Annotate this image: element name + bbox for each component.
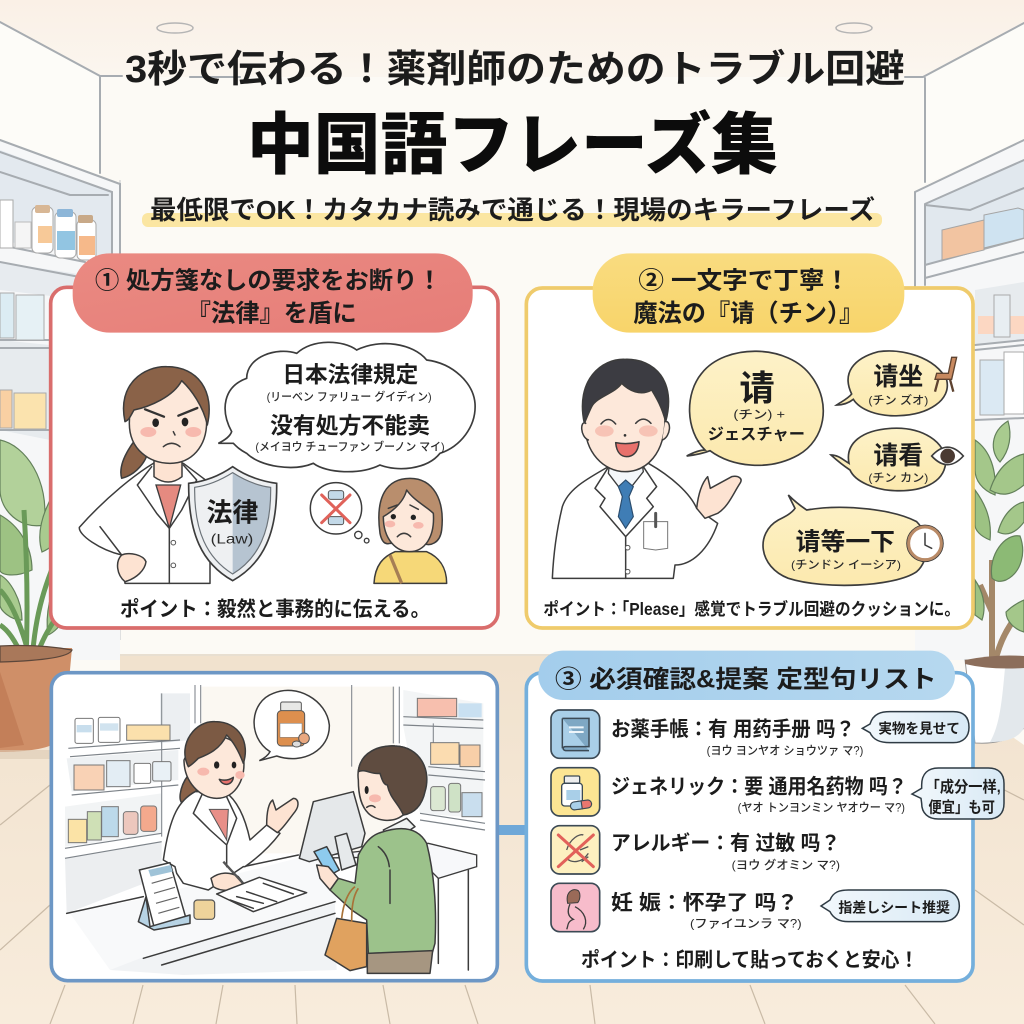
subtitle highlight band [142, 213, 882, 227]
pharmacist talking [163, 722, 298, 891]
panel 2: magic word qing [526, 253, 973, 628]
icon: crossed allergy [551, 826, 600, 874]
speech bubble: please wait: (チンドン イーシア) [791, 558, 901, 571]
speech bubble: please look: (チン カン) [868, 472, 929, 485]
speech bubble: please sit [837, 351, 947, 416]
panel 1: refuse without prescription [51, 253, 498, 628]
icon: bottle and pills [551, 768, 600, 816]
callout: pointing sheet: 指差しシート推奨 [838, 900, 950, 916]
row 4: pregnancy: (ファイユンラ マ?) [690, 918, 802, 931]
monitor [299, 792, 365, 870]
counter [67, 843, 477, 975]
speech bubble: qing with gesture: (チン) + [733, 407, 785, 421]
panel 3 frame [51, 673, 497, 981]
icon: law shield: 法律 [207, 498, 258, 528]
panel 4 heading [538, 651, 955, 700]
floor [0, 656, 1024, 1024]
speech bubble: medicine bottle [254, 690, 329, 761]
callout: same ingredients: 「成分一样, [926, 778, 1001, 796]
speech cloud: legal statement: (メイヨウ チューファン ブーノン マイ) [255, 440, 445, 454]
row 1: medicine notebook: (ヨウ ヨンヤオ ショウツァ マ?) [707, 744, 863, 757]
icon: book [551, 710, 600, 758]
clipboard sign [138, 863, 190, 930]
panel 2 heading: 魔法の『请（チン）』 [633, 300, 863, 328]
panel 4: checklist [526, 651, 1004, 981]
speech bubble: please sit: 请坐 [873, 363, 923, 391]
thought bubble: crossed out medicine [310, 483, 369, 543]
title line 1: 3秒で伝わる！薬剤師のためのトラブル回避 [125, 48, 905, 91]
icon: law shield [189, 467, 277, 581]
speech bubble: please wait [763, 495, 927, 585]
callout: same ingredients: 便宜」も可 [928, 798, 995, 816]
row 4: pregnancy [551, 883, 959, 932]
callout: show real item: 実物を見せて [878, 720, 960, 736]
icon: law shield: (Law) [211, 530, 253, 546]
row 3: allergy: (ヨウ グオミン マ?) [732, 858, 840, 872]
panel 2 heading: ② 一文字で丁寧！ [638, 268, 850, 295]
right shelf [915, 140, 1024, 660]
right plant [980, 560, 1024, 662]
back wall and shelves [65, 685, 485, 913]
patient: worried woman [374, 478, 447, 583]
row 2: generic drug: (ヤオ トンヨンミン ヤオウー マ?) [738, 802, 905, 815]
panel 1 heading: 『法律』を盾に [187, 300, 357, 328]
speech bubble: please wait: 请等一下 [796, 528, 895, 556]
panel 2 heading [593, 253, 904, 333]
point text: ポイント：「Please」感覚でトラブル回避のクッションに。 [543, 599, 960, 619]
panel 2 frame [526, 288, 973, 628]
pharmacist with stern face [79, 367, 210, 583]
row 2: generic drug: ジェネリック：要 通用名药物 吗？ [611, 775, 907, 798]
point text: ポイント：印刷して貼っておくと安心！ [581, 949, 918, 972]
speech bubble: please look: 请看 [873, 442, 923, 470]
row 4: pregnancy: 妊 娠：怀孕了 吗？ [611, 891, 798, 914]
row 1: medicine notebook: お薬手帳：有 用药手册 吗？ [611, 718, 855, 741]
connector between panels 3 and 4 [498, 825, 528, 835]
speech cloud: legal statement [218, 342, 475, 472]
panel 4 heading: ③ 必須確認&提案 定型句リスト [555, 665, 937, 693]
row 3: allergy: アレルギー：有 过敏 吗？ [611, 832, 840, 855]
icon: clock [907, 525, 943, 562]
speech cloud: legal statement: 没有処方不能卖 [270, 412, 430, 438]
point text: ポイント：毅然と事務的に伝える。 [120, 597, 430, 621]
row 3: allergy [551, 826, 840, 874]
panel 3: counter scene illustration [51, 673, 497, 981]
callout: show real item [862, 712, 969, 743]
panel 1 heading [73, 253, 473, 333]
panel 1 frame [51, 287, 498, 628]
left shelf [0, 140, 120, 660]
callout: pointing sheet [821, 890, 959, 922]
icon: eye [932, 447, 963, 465]
row 1: medicine notebook [551, 710, 969, 758]
left plant [0, 440, 45, 526]
open notebook [217, 877, 307, 912]
smiling male pharmacist [552, 359, 741, 578]
small box on counter [194, 900, 215, 919]
speech bubble: qing with gesture: 请 [739, 370, 775, 409]
icon: chair [935, 357, 957, 392]
speech bubble: qing with gesture [687, 351, 823, 465]
main title: 中国語フレーズ集 [247, 108, 778, 183]
panel 1 heading: ① 処方箋なしの要求をお断り！ [95, 268, 442, 295]
speech bubble: please sit: (チン ズオ) [868, 393, 929, 407]
speech cloud: legal statement: 日本法律規定 [282, 362, 418, 388]
speech bubble: please look [831, 428, 946, 491]
speech bubble: qing with gesture: ジェスチャー [708, 425, 805, 443]
speech cloud: legal statement: (リーベン ファリュー グイディン) [267, 390, 432, 404]
panel 4 frame [526, 673, 973, 981]
row 2: generic drug [551, 768, 1004, 819]
subtitle: 最低限でOK！カタカナ読みで通じる！現場のキラーフレーズ [150, 195, 875, 225]
customer with phone and bag [314, 746, 436, 973]
icon: pregnant woman [551, 883, 600, 932]
callout: same ingredients [912, 768, 1004, 819]
